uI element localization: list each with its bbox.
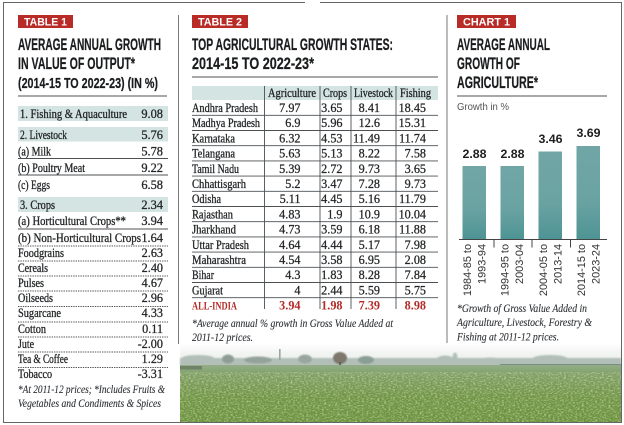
footnote: chart 1: *Growth of Gross Value Added in [457, 303, 587, 315]
row: Maharashtra: 6.95 [359, 253, 380, 267]
row: All-India: 8.98 [405, 299, 426, 313]
axis labels: 1993-94 [476, 244, 488, 284]
row: Odisha: 5.16 [359, 192, 380, 206]
row: poultry meat: 9.22 [141, 161, 163, 175]
row: cereals: 2.40 [142, 261, 163, 275]
bar: 2014-15 to 2023-24: 3.69 [576, 126, 601, 140]
row: Bihar: 1.83 [321, 268, 342, 282]
row: cotton [18, 322, 163, 336]
footnote: chart 1 [456, 303, 592, 344]
table header row: Livestock [354, 86, 394, 100]
heading: chart 1 title [457, 35, 550, 92]
table header row: Crops [323, 86, 347, 100]
row: All-India: 3.94 [279, 299, 300, 313]
row: crops: 2.34 [141, 198, 163, 212]
tag: CHART 1: CHART 1 [463, 17, 510, 29]
footnote: table 1 [18, 384, 165, 410]
row: crops [18, 197, 168, 212]
row: foodgrains: Foodgrains [18, 246, 64, 260]
row: Telangana [192, 147, 426, 161]
row: Karnataka: 11.49 [353, 131, 380, 145]
axis labels: 2003-04 [514, 244, 526, 284]
row: Odisha: Odisha [192, 192, 221, 206]
bar chart [459, 126, 607, 296]
tag: TABLE 2: TABLE 2 [198, 17, 242, 29]
heading: table 2 title [192, 35, 393, 73]
axis labels: 1984-85 to [462, 244, 474, 296]
table header row: Fishing [400, 86, 431, 100]
row: Bihar: 8.28 [359, 268, 380, 282]
panel: chart 1 [456, 15, 607, 344]
row: Uttar Pradesh: 4.44 [321, 238, 342, 252]
row: Madhya Pradesh: 6.9 [285, 116, 300, 130]
row: Madhya Pradesh: 5.96 [321, 116, 342, 130]
footnote: chart 1: Fishing at 2011-12 prices. [456, 332, 559, 344]
row: tobacco: Tobacco [18, 367, 52, 381]
row: Telangana: 7.58 [405, 147, 426, 161]
row: All-India: 7.39 [359, 299, 380, 313]
row: poultry meat: (b) Poultry Meat [18, 161, 85, 175]
bar: 2004-05 to 2013-14: 3.46 [538, 132, 563, 146]
row: Telangana: 5.13 [321, 147, 342, 161]
row: tea and coffee: 1.29 [142, 352, 163, 366]
row: fishing and aquaculture: 9.08 [141, 107, 163, 121]
row: milk: (a) Milk [18, 144, 52, 158]
axis labels [462, 244, 602, 296]
row: Maharashtra: 4.54 [279, 253, 300, 267]
row: Uttar Pradesh: 5.17 [359, 238, 380, 252]
row: All-India [192, 299, 426, 313]
bar: 2014-15 to 2023-24 [576, 126, 601, 239]
row: Uttar Pradesh: 7.98 [405, 238, 426, 252]
row: Jharkhand: 11.88 [399, 223, 426, 237]
row: Tamil Nadu: 9.73 [359, 162, 380, 176]
table header row [192, 86, 438, 100]
row: Tamil Nadu: 2.72 [321, 162, 342, 176]
heading: table 2 title: TOP AGRICULTURAL GROWTH STATES: [192, 35, 393, 54]
row: oilseeds [18, 291, 163, 305]
photo: green crop field [180, 343, 621, 423]
footnote: table 2: *Average annual % growth in Gross Value Added at [192, 318, 394, 330]
tag: TABLE 1: TABLE 1 [24, 17, 67, 29]
row: cereals: Cereals [18, 261, 48, 275]
row: Rajasthan: 10.04 [399, 207, 426, 221]
row: eggs: (c) Eggs [18, 178, 50, 192]
row: Jharkhand: 6.18 [359, 223, 380, 237]
row: Chhattisgarh: Chhattisgarh [192, 177, 246, 191]
row: Chhattisgarh: 7.28 [359, 177, 380, 191]
row: Odisha [192, 192, 426, 206]
row: sugarcane: Sugarcane [18, 306, 61, 320]
row: Uttar Pradesh: 4.64 [279, 238, 300, 252]
table header row: Agriculture [268, 86, 316, 100]
heading: chart 1 title: AGRICULTURE* [457, 73, 538, 92]
row: Tamil Nadu: 5.39 [279, 162, 300, 176]
row: Gujarat: 5.59 [359, 283, 380, 297]
axis labels: 2023-24 [590, 244, 602, 284]
row: Karnataka: 11.74 [399, 131, 426, 145]
row: oilseeds: Oilseeds [18, 291, 53, 305]
row: Madhya Pradesh: 12.6 [359, 116, 380, 130]
row: Uttar Pradesh [192, 238, 426, 252]
row: eggs [18, 178, 163, 192]
row: horticultural crops: (a) Horticultural Crops** [18, 214, 126, 228]
row: Bihar: 4.3 [285, 268, 300, 282]
footnote: table 1: Vegetables and Condiments & Spices [18, 398, 161, 410]
heading: table 1 title: IN VALUE OF OUTPUT* [18, 54, 135, 73]
row: Rajasthan: Rajasthan [192, 207, 233, 221]
row: Gujarat: 5.75 [405, 283, 426, 297]
footnote: table 1: *At 2011-12 prices; *Includes Fruits & [18, 384, 165, 396]
row: sugarcane: 4.33 [142, 306, 163, 320]
row: Andhra Pradesh: 18.45 [399, 101, 426, 115]
row: Andhra Pradesh: 8.41 [359, 101, 380, 115]
bar: 1984-85 to 1993-94 [462, 147, 487, 239]
row: Madhya Pradesh [192, 116, 426, 130]
row: pulses [18, 276, 163, 290]
row: Telangana: Telangana [192, 147, 236, 161]
row: milk [18, 144, 163, 158]
axis labels: 2014-15 to [576, 244, 588, 296]
row: oilseeds: 2.96 [142, 291, 163, 305]
row: Tamil Nadu: Tamil Nadu [192, 162, 239, 176]
row: Madhya Pradesh: Madhya Pradesh [192, 116, 260, 130]
row: jute: -2.00 [138, 337, 163, 351]
footnote: chart 1: Agriculture, Livestock, Forestry & [456, 317, 592, 329]
row: jute: Jute [18, 337, 34, 351]
row: Karnataka: 4.53 [321, 131, 342, 145]
bar: 2004-05 to 2013-14 [538, 132, 563, 239]
axis labels: 2004-05 to [538, 244, 550, 296]
row: Odisha: 11.79 [399, 192, 426, 206]
row: Chhattisgarh: 5.2 [285, 177, 300, 191]
row: Tamil Nadu [192, 162, 426, 176]
row: Andhra Pradesh: Andhra Pradesh [192, 101, 258, 115]
row: tea and coffee: Tea & Coffee [18, 352, 68, 366]
row: Maharashtra: 3.58 [321, 253, 342, 267]
axis labels: 1994-95 to [500, 244, 512, 296]
row: pulses: 4.67 [142, 276, 163, 290]
row: Andhra Pradesh: 3.65 [321, 101, 342, 115]
row: cotton: Cotton [18, 322, 46, 336]
row: Bihar: 7.84 [405, 268, 426, 282]
row: tobacco [18, 367, 163, 381]
row: Rajasthan: 1.9 [327, 207, 342, 221]
row: Karnataka: 6.32 [279, 131, 300, 145]
row: Tamil Nadu: 3.65 [405, 162, 426, 176]
row: pulses: Pulses [18, 276, 44, 290]
row: eggs: 6.58 [141, 178, 163, 192]
row: Chhattisgarh [192, 177, 426, 191]
footnote: table 2: 2011-12 prices. [192, 332, 253, 344]
heading: table 1 title: (2014-15 TO 2022-23) (IN %) [18, 76, 158, 92]
row: Bihar: Bihar [192, 268, 214, 282]
bar: 1994-95 to 2003-04: 2.88 [500, 147, 525, 161]
row: Jharkhand: Jharkhand [192, 223, 236, 237]
row: poultry meat [18, 161, 163, 175]
row: Uttar Pradesh: Uttar Pradesh [192, 238, 249, 252]
heading: table 1 title: AVERAGE ANNUAL GROWTH [18, 35, 161, 54]
row: All-India: 1.98 [321, 299, 342, 313]
row: Jharkhand: 4.73 [279, 223, 300, 237]
row: horticultural crops: 3.94 [141, 214, 163, 228]
row: Maharashtra [192, 253, 426, 267]
row: Jharkhand [192, 223, 426, 237]
heading: table 1 title [18, 35, 161, 92]
panel: table 2 [192, 15, 438, 344]
row: cereals [18, 261, 163, 275]
row: Telangana: 8.22 [359, 147, 380, 161]
row: Karnataka: Karnataka [192, 131, 236, 145]
axis labels: 2013-14 [552, 244, 564, 284]
row: foodgrains [18, 246, 163, 260]
row: Rajasthan [192, 207, 426, 221]
row: All-India: ALL-INDIA [192, 299, 237, 313]
footnote: table 2 [192, 318, 394, 344]
row: Rajasthan: 4.83 [279, 207, 300, 221]
row: cotton: 0.11 [142, 322, 163, 336]
row: Bihar [192, 268, 426, 282]
row: Odisha: 5.11 [280, 192, 300, 206]
row: sugarcane [18, 306, 163, 320]
row: Rajasthan: 10.9 [359, 207, 380, 221]
row: Andhra Pradesh [192, 101, 426, 115]
row: Odisha: 4.45 [321, 192, 342, 206]
row: tea and coffee [18, 352, 163, 366]
row: non-horticultural crops: 1.64 [141, 231, 163, 245]
row: Telangana: 5.63 [279, 147, 300, 161]
panel: table 1 [18, 15, 168, 410]
axis unit label: Growth in % [457, 102, 509, 113]
row: fishing and aquaculture: 1. Fishing & Aquaculture [20, 107, 127, 121]
row: Madhya Pradesh: 15.31 [399, 116, 426, 130]
row: livestock [18, 127, 168, 142]
row: non-horticultural crops: (b) Non-Horticultural Crops [18, 231, 141, 245]
row: Gujarat: Gujarat [192, 283, 224, 297]
row: Maharashtra: 2.08 [405, 253, 426, 267]
row: milk: 5.78 [141, 144, 163, 158]
row: livestock: 2. Livestock [20, 128, 68, 142]
heading: chart 1 title: GROWTH OF [457, 54, 520, 73]
heading: chart 1 title: AVERAGE ANNUAL [457, 35, 550, 54]
row: foodgrains: 2.63 [142, 246, 163, 260]
row: Gujarat: 4 [294, 283, 300, 297]
row: jute [18, 337, 163, 351]
row: Jharkhand: 3.59 [321, 223, 342, 237]
row: Chhattisgarh: 9.73 [405, 177, 426, 191]
bar: 1994-95 to 2003-04 [500, 147, 525, 239]
row: livestock: 5.76 [141, 128, 163, 142]
row: Chhattisgarh: 3.47 [321, 177, 342, 191]
row: tobacco: -3.31 [138, 367, 163, 381]
bar: 1984-85 to 1993-94: 2.88 [462, 147, 487, 161]
row: Andhra Pradesh: 7.97 [279, 101, 300, 115]
row: Gujarat: 2.44 [321, 283, 342, 297]
row: Karnataka [192, 131, 426, 145]
heading: table 2 title: 2014-15 TO 2022-23* [192, 54, 314, 73]
row: Gujarat [192, 283, 426, 297]
row: Maharashtra: Maharashtra [192, 253, 247, 267]
row: crops: 3. Crops [20, 198, 55, 212]
